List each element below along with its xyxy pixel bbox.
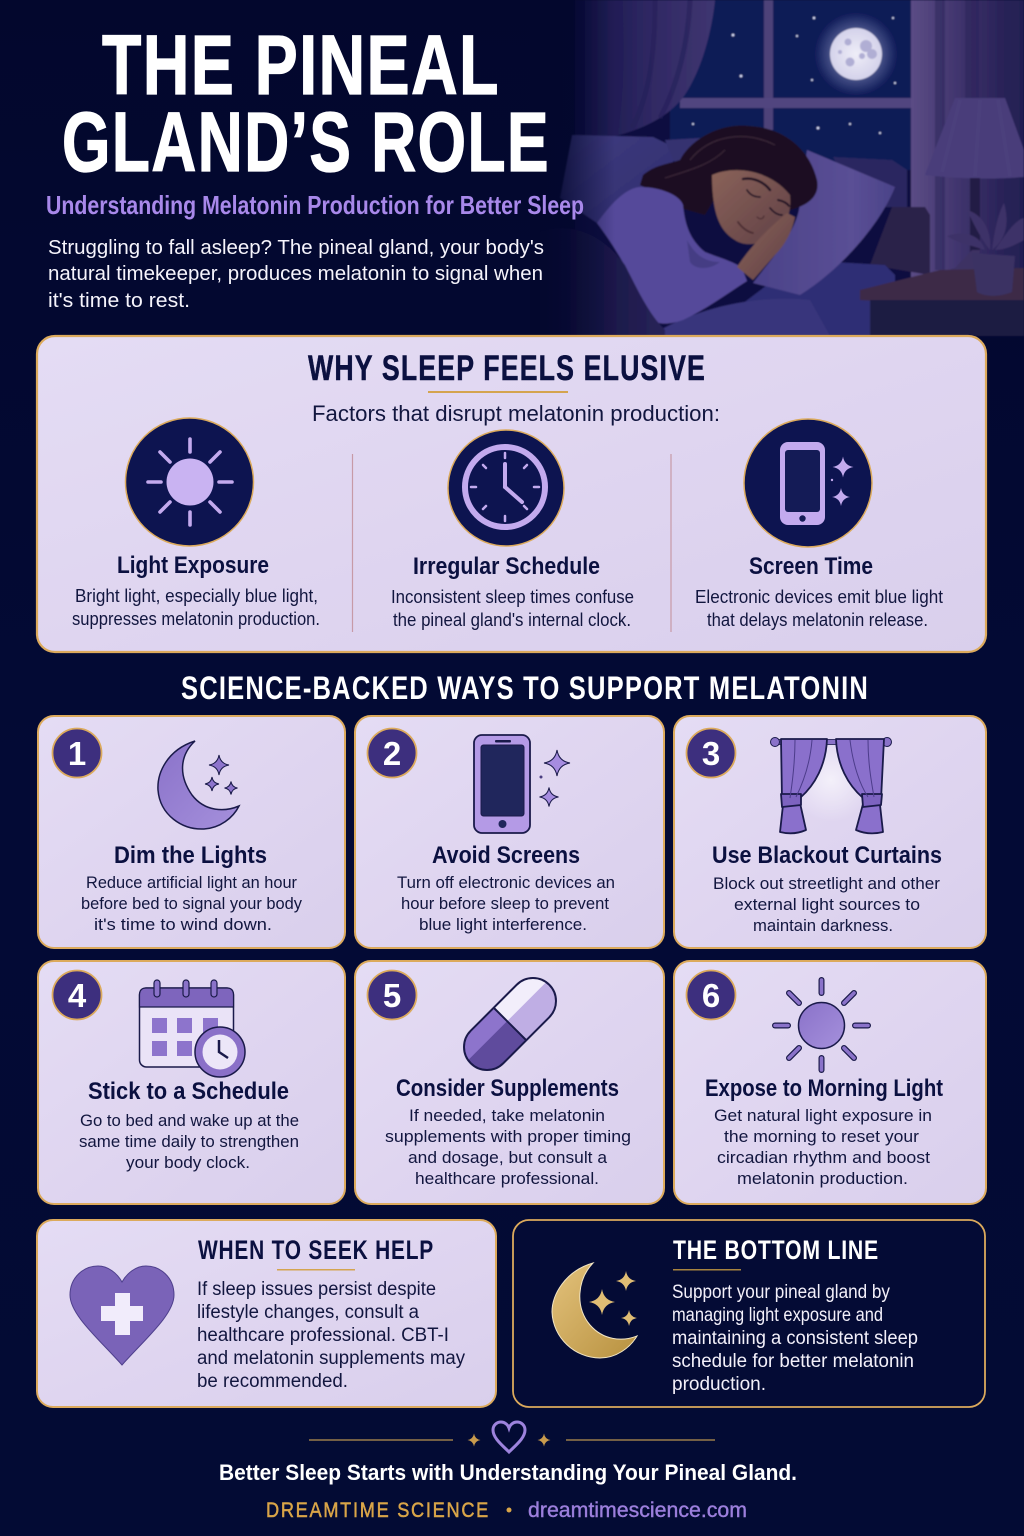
factor: light exposure: Light Exposure [117,552,269,579]
card description: Block out streetlight and other [713,874,940,893]
panel heading: WHEN TO SEEK HELP [198,1235,434,1265]
title [62,18,550,189]
card description: Turn off electronic devices an [397,873,615,892]
subtitle: Understanding Melatonin Production for Better Sleep [46,190,584,220]
card description [714,1106,932,1188]
icon: phone [474,735,570,833]
factor: light exposure: Bright light, especially blue light, [75,586,318,606]
factor: irregular schedule [391,553,634,630]
icon: heart with cross [70,1266,174,1365]
card description: the morning to reset your [724,1127,919,1146]
card 3: use blackout curtains [674,716,986,948]
card description: If needed, take melatonin [409,1106,605,1125]
card 2: avoid screens [355,716,664,948]
factor: light exposure: suppresses melatonin production. [72,609,320,629]
card description: circadian rhythm and boost [717,1148,930,1167]
panel: why sleep feels elusive [37,336,986,652]
card description: Get natural light exposure in [714,1106,932,1125]
icon: gold crescent and stars [552,1263,637,1358]
card description: Reduce artificial light an hour [86,873,297,892]
footer ornament: heart and stars [309,1422,715,1452]
number badge 5: 5 [383,977,401,1014]
footer brand and website: DREAMTIME SCIENCE [266,1499,490,1522]
panel body text: Support your pineal gland by [672,1282,890,1303]
card description: healthcare professional. [415,1169,599,1188]
panel body text: be recommended. [197,1371,348,1392]
panel: when to seek help [37,1220,496,1407]
number badge 4 [52,970,102,1020]
card description: hour before sleep to prevent [401,894,609,913]
panel body text: managing light exposure and [672,1305,883,1326]
number badge 5 [368,970,416,1020]
factor: screen time: that delays melatonin release. [707,610,928,630]
card description [397,873,615,934]
number badge 3: 3 [702,735,720,772]
factor: screen time: Electronic devices emit blue light [695,587,943,607]
number badge 6 [686,970,736,1020]
card description: supplements with proper timing [385,1127,631,1146]
panel body text: schedule for better melatonin [672,1351,914,1372]
card title: Stick to a Schedule [88,1078,289,1105]
icon: crescent moon [158,741,239,829]
icon: calendar with clock [140,980,245,1077]
card description: before bed to signal your body [81,894,302,913]
title: GLAND’S ROLE [62,95,550,189]
card description: external light sources to [734,895,920,914]
card 4: stick to a schedule [38,961,345,1204]
panel body text: If sleep issues persist despite [197,1279,436,1300]
card description: Go to bed and wake up at the [80,1111,299,1130]
section heading: SCIENCE-BACKED WAYS TO SUPPORT MELATONIN [181,670,869,706]
intro text: natural timekeeper, produces melatonin to signal when [48,262,543,285]
card description: maintain darkness. [753,916,893,935]
card description: it's time to wind down. [94,915,272,934]
card description: and dosage, but consult a [408,1148,608,1167]
card description: blue light interference. [419,915,587,934]
factor: screen time [695,553,943,630]
card title: Dim the Lights [114,842,267,869]
number badge 1: 1 [68,735,86,772]
card description: melatonin production. [737,1169,908,1188]
factor: irregular schedule: Inconsistent sleep times confuse [391,587,634,607]
panel: the bottom line [513,1220,985,1407]
factor: irregular schedule: Irregular Schedule [413,553,600,580]
panel body text: and melatonin supplements may [197,1348,465,1369]
panel body text: healthcare professional. CBT-I [197,1325,449,1346]
hero illustration: woman sleeping by moonlit window [530,0,1024,336]
panel heading: THE BOTTOM LINE [673,1235,879,1265]
icon: morning sun [775,980,868,1070]
panel body text: lifestyle changes, consult a [197,1302,419,1323]
footer brand and website: dreamtimescience.com [528,1499,747,1522]
factor: screen time: Screen Time [749,553,873,580]
icon: capsule [454,968,566,1080]
panel body text: maintaining a consistent sleep [672,1328,918,1349]
number badge 1 [52,728,102,778]
panel body text [197,1279,465,1392]
card description [713,874,940,935]
factor: light exposure [72,552,320,629]
card description: same time daily to strengthen [79,1132,299,1151]
card description [81,873,302,934]
panel body text: production. [672,1374,766,1395]
intro text [48,236,544,312]
card 1: dim the lights [38,716,345,948]
panel body text [672,1282,918,1395]
icon: sun [126,418,254,546]
card 6: expose to morning light [674,961,986,1204]
icon: clock [448,430,564,546]
number badge 4: 4 [68,977,87,1014]
footer brand and website [266,1499,747,1522]
card description [79,1111,299,1172]
card title: Consider Supplements [396,1075,619,1102]
panel intro line: Factors that disrupt melatonin production: [312,401,720,426]
intro text: it's time to rest. [48,289,190,312]
factor: irregular schedule: the pineal gland's internal clock. [393,610,631,630]
number badge 2: 2 [383,735,401,772]
intro text: Struggling to fall asleep? The pineal gland, your body's [48,236,544,259]
number badge 2 [368,728,416,778]
title: THE PINEAL [102,18,500,112]
card title: Avoid Screens [432,842,580,869]
number badge 6: 6 [702,977,720,1014]
card title: Use Blackout Curtains [712,842,942,869]
footer tagline: Better Sleep Starts with Understanding Your Pineal Gland. [219,1460,797,1485]
icon: phone with sparkles [744,419,872,547]
card 5: consider supplements [355,961,664,1204]
icon: curtains [770,738,892,833]
card title: Expose to Morning Light [705,1075,943,1102]
panel heading: WHY SLEEP FEELS ELUSIVE [308,349,706,388]
card description: your body clock. [126,1153,250,1172]
card description [385,1106,631,1188]
number badge 3 [686,728,736,778]
